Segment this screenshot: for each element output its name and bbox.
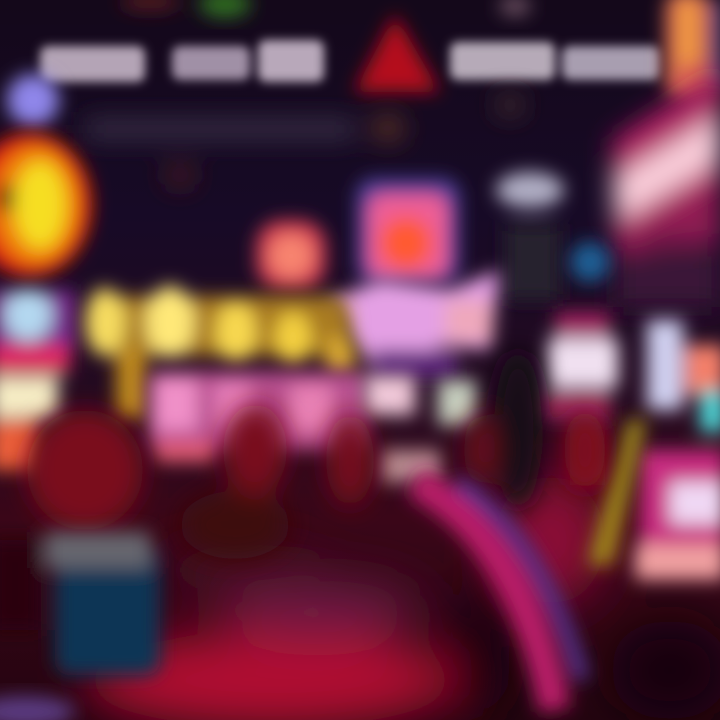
blue light: [570, 242, 610, 282]
people silhouettes: [27, 350, 605, 559]
round red and yellow sign: [0, 133, 92, 277]
pink stage: [330, 270, 500, 378]
right machines: [540, 312, 618, 485]
pink slot machines: [148, 372, 366, 462]
white blob sign: [496, 172, 564, 300]
central machines: [365, 375, 476, 482]
subtitle blur: [85, 95, 524, 187]
yellow pole: [588, 420, 646, 565]
top accents: [120, 0, 531, 18]
bottom left corner: [0, 696, 75, 720]
central square pink sign: [356, 178, 460, 284]
title: left block: [40, 40, 324, 82]
row of yellow lights: [85, 286, 356, 418]
left slot tower: [0, 289, 75, 470]
periwinkle light: [7, 74, 59, 126]
round pink light: [256, 220, 326, 290]
right pink sign: [612, 70, 720, 307]
person in blue: [0, 532, 160, 675]
floor and carpet: [85, 475, 720, 720]
title: right block: [450, 42, 660, 80]
title: red triangle emblem: [354, 14, 440, 92]
top right sign: [665, 0, 720, 100]
curved carpet stripe: [415, 482, 582, 710]
far right machine: [635, 320, 720, 580]
